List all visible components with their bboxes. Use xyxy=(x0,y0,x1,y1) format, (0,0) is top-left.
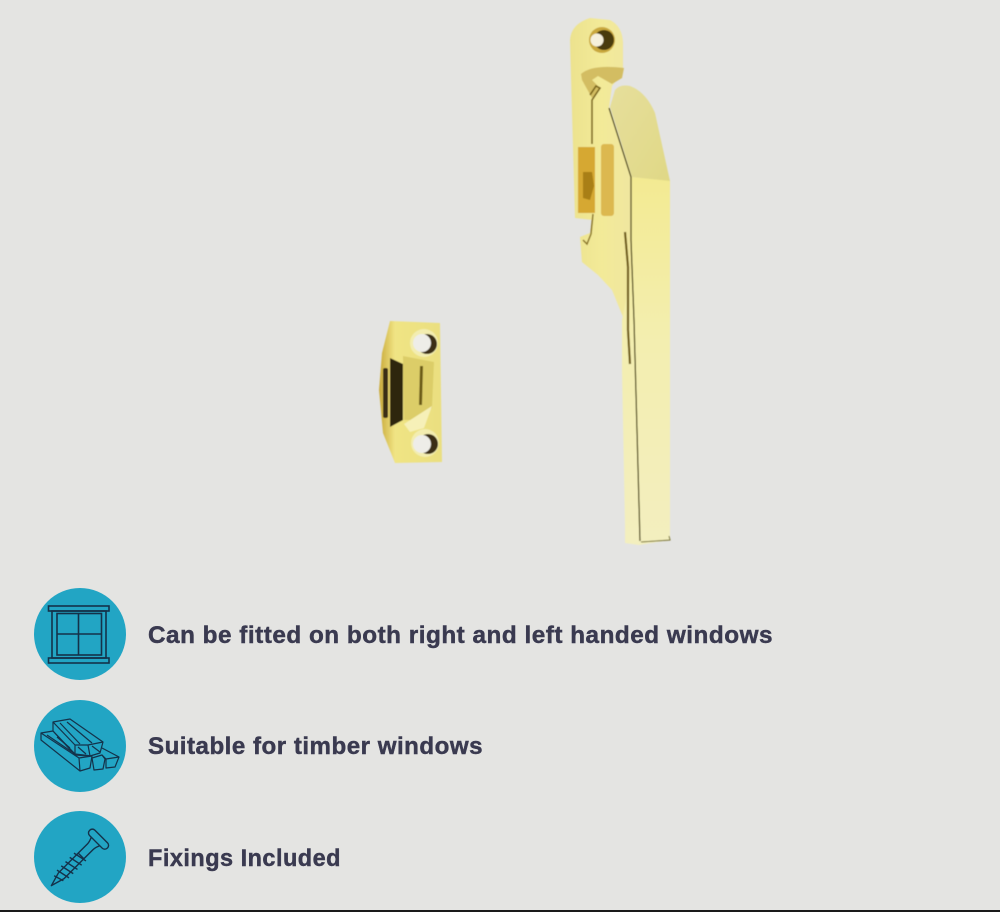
pivot hinge xyxy=(581,67,624,98)
handle back plate xyxy=(570,18,633,320)
icon: screw xyxy=(34,811,126,903)
lever edge shading xyxy=(609,108,640,541)
product image: window handle xyxy=(570,18,670,545)
fixing hole xyxy=(589,27,615,53)
feature row: window fitting xyxy=(34,588,773,680)
lever body xyxy=(622,177,670,545)
product image: keep plate xyxy=(379,321,442,463)
central recess xyxy=(383,356,434,432)
upper screw hole xyxy=(410,329,438,357)
plate body xyxy=(379,321,442,463)
feature text: fixings included: Fixings Included xyxy=(148,845,341,872)
feature text: timber windows: Suitable for timber windows xyxy=(148,733,483,760)
icon: window xyxy=(34,588,126,680)
latch window xyxy=(578,144,614,244)
bottom edge line xyxy=(0,910,1000,912)
lower screw hole xyxy=(411,429,439,457)
feature text: handedness: Can be fitted on both right and left handed windows xyxy=(148,622,773,649)
feature row: timber xyxy=(34,700,483,792)
feature row: fixings xyxy=(34,811,341,903)
lever angled cap xyxy=(610,86,670,181)
icon: timber beams xyxy=(34,700,126,792)
